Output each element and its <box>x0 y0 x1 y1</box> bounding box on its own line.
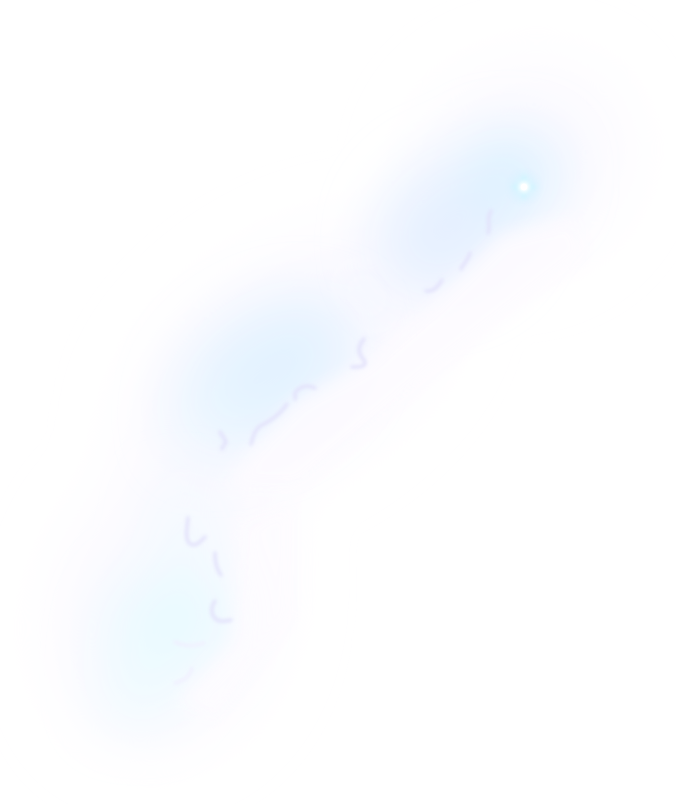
wisps: violet filaments <box>187 211 491 621</box>
wisps: faint lower filaments <box>175 642 204 683</box>
icon: bright star <box>504 167 544 207</box>
nebula: lower cyan cloud <box>82 485 258 723</box>
cut edge: soft mask below the trail <box>180 215 590 725</box>
nebula: middle blue cloud <box>149 268 381 482</box>
nebula: upper blue cloud <box>350 128 558 322</box>
